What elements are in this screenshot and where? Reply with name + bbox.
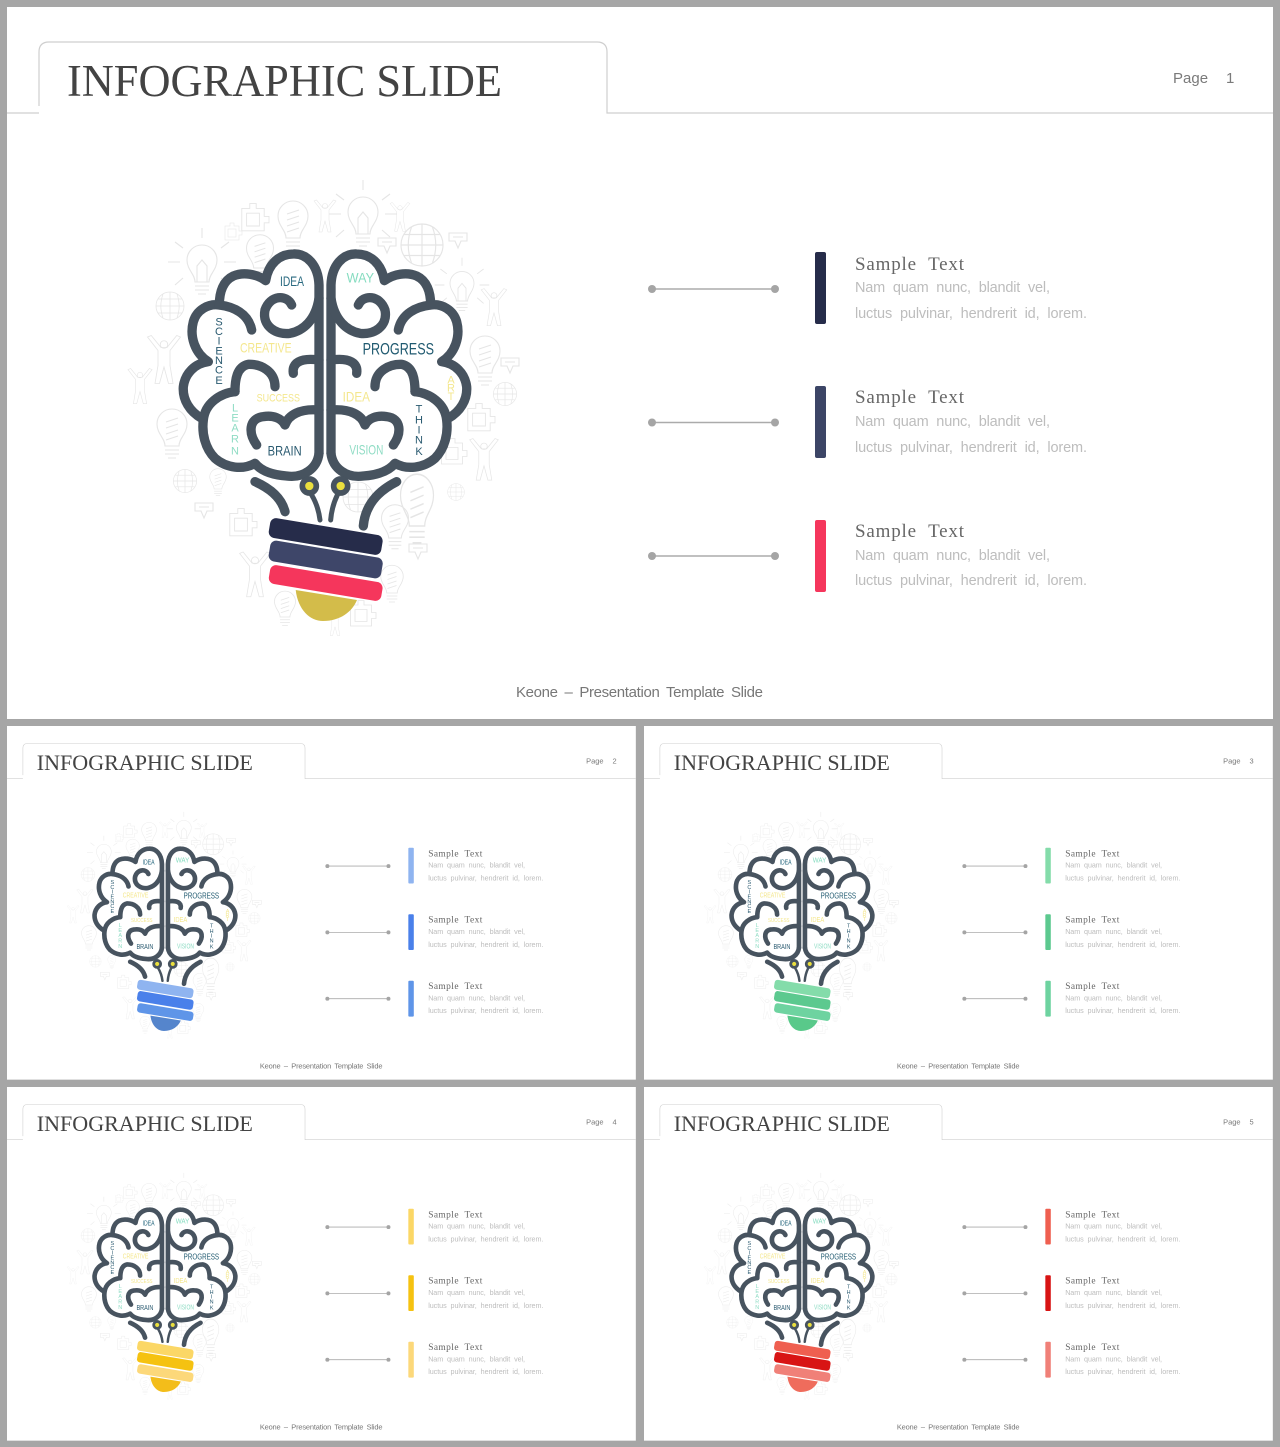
- brain words: IDEA: [780, 1221, 792, 1228]
- brain words: LEARN: [118, 923, 122, 950]
- item 1: Nam quam nunc, blandit vel,: [428, 861, 525, 870]
- brain words: PROGRESS: [821, 1253, 856, 1262]
- footer: Keone – Presentation Template Slide: [260, 1062, 383, 1071]
- item 1: Sample Text: [1065, 1211, 1120, 1221]
- title: INFOGRAPHIC SLIDE: [67, 56, 502, 106]
- brain words: PROGRESS: [821, 892, 856, 901]
- brain words: IDEA: [174, 1278, 188, 1285]
- brain words: WAY: [176, 1219, 190, 1226]
- item 1: [408, 1209, 543, 1244]
- brain words: PROGRESS: [363, 339, 434, 358]
- item 2: luctus pulvinar, hendrerit id, lorem.: [428, 1301, 543, 1310]
- item 1: Sample Text: [1065, 850, 1120, 860]
- page number: 2: [612, 757, 617, 766]
- item 3: Sample Text: [1065, 982, 1120, 992]
- brain words: THINK: [847, 1284, 851, 1312]
- item 3: [1045, 1342, 1180, 1378]
- item 2: Nam quam nunc, blandit vel,: [428, 927, 525, 936]
- item 3: Nam quam nunc, blandit vel,: [1065, 994, 1162, 1003]
- brain words: SCIENCE: [110, 1241, 114, 1276]
- brain words: IDEA: [811, 1278, 825, 1285]
- brain words: BRAIN: [773, 1305, 790, 1312]
- brain words: BRAIN: [136, 944, 153, 951]
- bulb dome: [787, 1377, 818, 1392]
- brain words: CREATIVE: [123, 893, 149, 900]
- item 2: [408, 1275, 543, 1311]
- item 3: Sample Text: [1065, 1343, 1120, 1353]
- brain words: SUCCESS: [131, 1279, 153, 1285]
- brain words: [110, 858, 230, 951]
- brain words: BRAIN: [268, 443, 302, 459]
- brain words: WAY: [813, 1219, 827, 1226]
- item 1: [815, 252, 1087, 324]
- item 2: Sample Text: [1065, 916, 1120, 926]
- title: INFOGRAPHIC SLIDE: [674, 1111, 890, 1136]
- item 3: Sample Text: [428, 982, 483, 992]
- brain and bulb: [732, 1210, 872, 1382]
- brain words: SUCCESS: [768, 1279, 790, 1285]
- brain words: CREATIVE: [760, 893, 786, 900]
- brain words: LEARN: [231, 403, 239, 457]
- item 3: luctus pulvinar, hendrerit id, lorem.: [855, 573, 1087, 589]
- page number: Page: [1223, 757, 1241, 766]
- item 3: luctus pulvinar, hendrerit id, lorem.: [1065, 1367, 1180, 1376]
- item 2: Nam quam nunc, blandit vel,: [855, 414, 1050, 430]
- page number: Page: [586, 757, 604, 766]
- brain words: CREATIVE: [760, 1254, 786, 1261]
- connector lines: [648, 285, 779, 560]
- item 1: luctus pulvinar, hendrerit id, lorem.: [428, 873, 543, 882]
- page number: 4: [612, 1118, 617, 1127]
- page number: 3: [1249, 757, 1254, 766]
- brain words: IDEA: [280, 273, 304, 289]
- item 1: luctus pulvinar, hendrerit id, lorem.: [428, 1234, 543, 1243]
- item 1: Sample Text: [428, 850, 483, 860]
- brain words: ART: [863, 1270, 867, 1284]
- bulb bar top: [268, 517, 384, 556]
- bulb dome: [787, 1016, 818, 1031]
- bulb dome: [150, 1377, 181, 1392]
- page number: 5: [1249, 1118, 1254, 1127]
- brain words: CREATIVE: [123, 1254, 149, 1261]
- slide 4: yellow: [7, 1087, 636, 1441]
- slide 1: main slide: [7, 7, 1273, 719]
- brain words: ART: [447, 374, 455, 403]
- brain words: PROGRESS: [184, 1253, 219, 1262]
- item 2: [408, 914, 543, 950]
- brain words: THINK: [210, 1284, 214, 1312]
- brain words: IDEA: [780, 860, 792, 867]
- brain words: IDEA: [143, 860, 155, 867]
- item 3: Sample Text: [855, 521, 965, 542]
- item 3: [815, 520, 1087, 592]
- brain words: VISION: [177, 1304, 194, 1311]
- title: INFOGRAPHIC SLIDE: [37, 1111, 253, 1136]
- footer: Keone – Presentation Template Slide: [260, 1423, 383, 1432]
- brain words: ART: [863, 909, 867, 923]
- item 1: luctus pulvinar, hendrerit id, lorem.: [1065, 873, 1180, 882]
- item 3: Nam quam nunc, blandit vel,: [1065, 1355, 1162, 1364]
- bulb bar bottom: [268, 564, 383, 602]
- title: INFOGRAPHIC SLIDE: [674, 750, 890, 775]
- brain words: LEARN: [118, 1284, 122, 1311]
- item 1: Sample Text: [855, 254, 965, 275]
- item 1: [1045, 1209, 1180, 1244]
- brain words: SCIENCE: [747, 880, 751, 915]
- brain words: IDEA: [143, 1221, 155, 1228]
- brain words: SCIENCE: [110, 880, 114, 915]
- brain words: SUCCESS: [131, 918, 153, 924]
- brain words: SCIENCE: [747, 1241, 751, 1276]
- item 2: [1045, 1275, 1180, 1311]
- brain words: VISION: [814, 943, 831, 950]
- brain words: SUCCESS: [768, 918, 790, 924]
- bulb bar middle: [268, 540, 384, 579]
- item 3: Nam quam nunc, blandit vel,: [855, 548, 1050, 564]
- item 3: luctus pulvinar, hendrerit id, lorem.: [1065, 1006, 1180, 1015]
- item 1: [1045, 848, 1180, 883]
- brain words: IDEA: [811, 917, 825, 924]
- item 3: luctus pulvinar, hendrerit id, lorem.: [428, 1006, 543, 1015]
- item 2: luctus pulvinar, hendrerit id, lorem.: [855, 440, 1087, 456]
- brain and bulb: [95, 1210, 235, 1382]
- brain words: ART: [226, 909, 230, 923]
- brain words: BRAIN: [773, 944, 790, 951]
- item 1: luctus pulvinar, hendrerit id, lorem.: [855, 306, 1087, 322]
- brain words: SCIENCE: [215, 316, 223, 387]
- brain line art: [183, 254, 467, 526]
- item 1: Nam quam nunc, blandit vel,: [428, 1222, 525, 1231]
- footer: Keone – Presentation Template Slide: [897, 1062, 1020, 1071]
- brain words: WAY: [176, 858, 190, 865]
- item 2: Nam quam nunc, blandit vel,: [1065, 1288, 1162, 1297]
- brain words: PROGRESS: [184, 892, 219, 901]
- brain words: [747, 1219, 867, 1312]
- brain words: THINK: [415, 404, 423, 458]
- item 1: Sample Text: [428, 1211, 483, 1221]
- brain words: VISION: [349, 442, 383, 458]
- brain and bulb: [732, 849, 872, 1021]
- slide 3: green: [644, 726, 1273, 1080]
- item 3: luctus pulvinar, hendrerit id, lorem.: [428, 1367, 543, 1376]
- item 2: Nam quam nunc, blandit vel,: [428, 1288, 525, 1297]
- brain and bulb: [95, 849, 235, 1021]
- item 1: luctus pulvinar, hendrerit id, lorem.: [1065, 1234, 1180, 1243]
- item 2: [815, 386, 1087, 458]
- brain words: IDEA: [343, 389, 371, 405]
- item 2: Sample Text: [1065, 1277, 1120, 1287]
- brain words: LEARN: [755, 1284, 759, 1311]
- item 3: Nam quam nunc, blandit vel,: [428, 994, 525, 1003]
- slide 2: blue: [7, 726, 636, 1080]
- page number: Page: [1223, 1118, 1241, 1127]
- item 1: Nam quam nunc, blandit vel,: [855, 280, 1050, 296]
- item 3: [408, 981, 543, 1017]
- item 2: Nam quam nunc, blandit vel,: [1065, 927, 1162, 936]
- item 2: [1045, 914, 1180, 950]
- item 3: Sample Text: [428, 1343, 483, 1353]
- item 3: [408, 1342, 543, 1378]
- item 2: luctus pulvinar, hendrerit id, lorem.: [428, 940, 543, 949]
- bulb dome: [150, 1016, 181, 1031]
- brain words: BRAIN: [136, 1305, 153, 1312]
- item 1: Nam quam nunc, blandit vel,: [1065, 1222, 1162, 1231]
- item 3: [1045, 981, 1180, 1017]
- item 1: Nam quam nunc, blandit vel,: [1065, 861, 1162, 870]
- footer: Keone – Presentation Template Slide: [897, 1423, 1020, 1432]
- header tab outline: [7, 42, 1273, 113]
- brain words: [110, 1219, 230, 1312]
- item 1: [408, 848, 543, 883]
- brain words: THINK: [847, 923, 851, 951]
- brain words: VISION: [177, 943, 194, 950]
- background doodle icons: [128, 180, 519, 636]
- brain words: CREATIVE: [240, 339, 292, 355]
- brain words: [747, 858, 867, 951]
- item 2: luctus pulvinar, hendrerit id, lorem.: [1065, 940, 1180, 949]
- brain words: ART: [226, 1270, 230, 1284]
- brain words: THINK: [210, 923, 214, 951]
- brain words: WAY: [347, 269, 375, 285]
- title: INFOGRAPHIC SLIDE: [37, 750, 253, 775]
- page number: Page: [586, 1118, 604, 1127]
- slide 5: red: [644, 1087, 1273, 1441]
- light bulb base dome: [296, 590, 357, 621]
- item 3: Nam quam nunc, blandit vel,: [428, 1355, 525, 1364]
- item 2: Sample Text: [428, 1277, 483, 1287]
- brain words: IDEA: [174, 917, 188, 924]
- footer: Keone – Presentation Template Slide: [516, 684, 763, 701]
- brain words: LEARN: [755, 923, 759, 950]
- item 2: luctus pulvinar, hendrerit id, lorem.: [1065, 1301, 1180, 1310]
- brain words: WAY: [813, 858, 827, 865]
- brain words: SUCCESS: [257, 393, 300, 405]
- item 2: Sample Text: [428, 916, 483, 926]
- page number: Page: [1173, 70, 1208, 87]
- page number: 1: [1226, 70, 1234, 87]
- brain words: VISION: [814, 1304, 831, 1311]
- brain words: [215, 269, 455, 459]
- item 2: Sample Text: [855, 387, 965, 408]
